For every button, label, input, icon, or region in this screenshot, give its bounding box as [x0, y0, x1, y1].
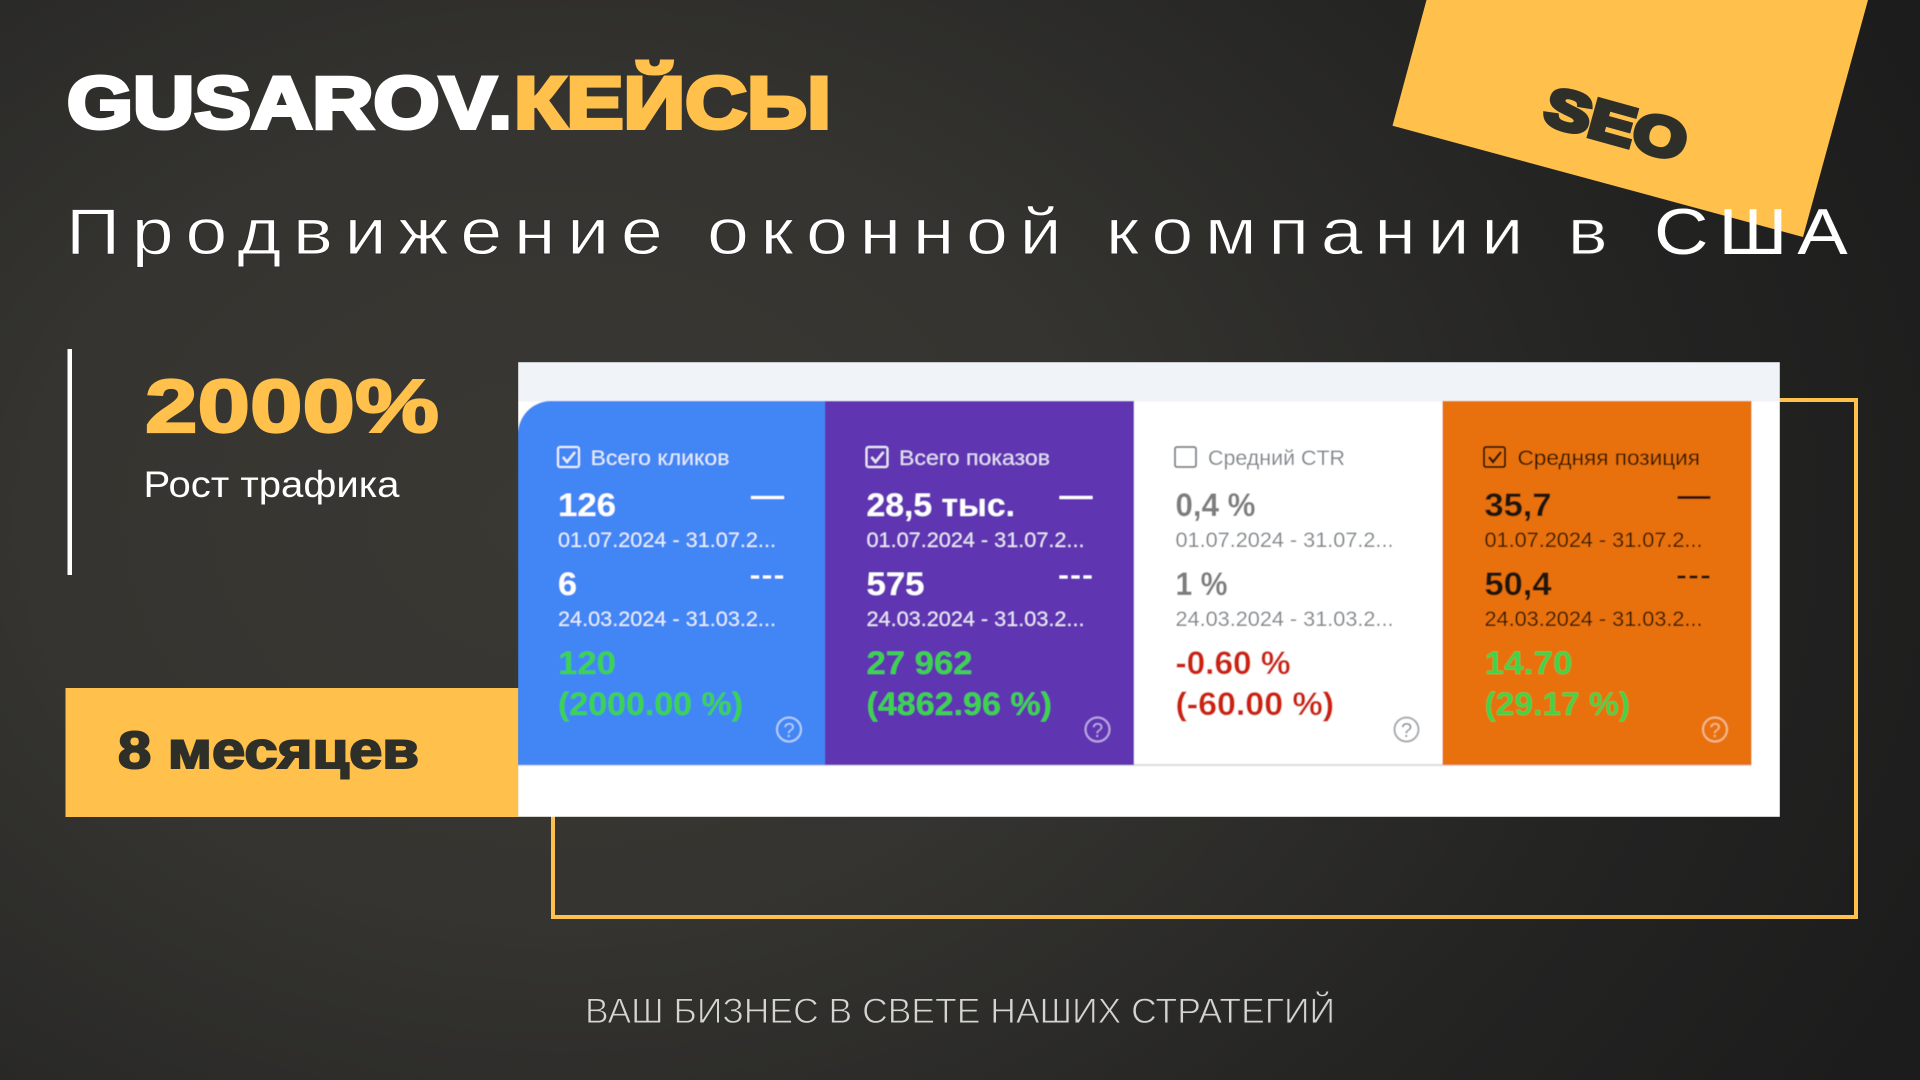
card: total impressions: 575	[866, 566, 924, 602]
help icon	[1394, 718, 1418, 742]
title: GUSAROV.	[67, 63, 512, 144]
card: average position: Средняя позиция	[1518, 447, 1700, 470]
card: total impressions: 28,5 тыс.	[866, 487, 1015, 523]
card: average CTR: 0,4 %	[1176, 487, 1256, 523]
card: total impressions: (4862.96 %)	[866, 686, 1052, 722]
card: average position: 24.03.2024 - 31.03.2...	[1484, 608, 1702, 631]
card: total clicks: Всего кликов	[590, 447, 730, 470]
search console screenshot panel	[518, 362, 1780, 817]
card: total impressions: 27 962	[866, 645, 972, 681]
card: average CTR: Средний CTR	[1208, 447, 1345, 470]
vertical white line	[68, 349, 72, 575]
subtitle: США	[1654, 195, 1848, 268]
card: average CTR: (-60.00 %)	[1176, 686, 1334, 722]
card: average CTR: 24.03.2024 - 31.03.2...	[1176, 608, 1394, 631]
checkbox	[558, 447, 579, 467]
card: average CTR: 1 %	[1176, 566, 1228, 602]
card: average position: 35,7	[1484, 487, 1552, 523]
title	[67, 62, 831, 144]
card: average position	[1442, 401, 1752, 765]
card: average CTR	[1175, 447, 1418, 742]
card: average position: (29.17 %)	[1484, 686, 1630, 722]
card: average CTR: 01.07.2024 - 31.07.2...	[1176, 529, 1394, 552]
metric caption: Рост трафика	[144, 464, 400, 505]
help icon: ?	[1709, 720, 1721, 742]
card: total clicks: 6	[558, 566, 577, 602]
help icon	[1086, 718, 1110, 742]
duration badge	[66, 688, 518, 817]
SEO label: SEO	[1539, 75, 1694, 173]
help icon: ?	[1092, 720, 1103, 742]
checkbox	[1484, 447, 1505, 467]
checkbox	[1175, 447, 1196, 467]
yellow frame	[553, 400, 1856, 917]
card: total impressions: Всего показов	[899, 447, 1050, 470]
card: total clicks: 24.03.2024 - 31.03.2...	[558, 608, 776, 631]
card: average position: 01.07.2024 - 31.07.2...	[1484, 529, 1702, 552]
card: total clicks: 120	[558, 645, 616, 681]
help icon	[1703, 718, 1727, 742]
card: total clicks: 01.07.2024 - 31.07.2...	[558, 529, 776, 552]
card: average CTR: -0.60 %	[1176, 645, 1290, 681]
footer tagline: ВАШ БИЗНЕС В СВЕТЕ НАШИХ СТРАТЕГИЙ	[585, 991, 1335, 1031]
title: КЕЙСЫ	[514, 62, 831, 144]
help icon: ?	[1401, 720, 1412, 742]
card: total impressions: 24.03.2024 - 31.03.2...	[866, 608, 1084, 631]
yellow SEO tag	[1392, 0, 1868, 237]
card: total clicks	[518, 401, 825, 765]
help icon	[777, 718, 801, 742]
help icon: ?	[783, 720, 795, 742]
card: total clicks: 126	[558, 487, 616, 523]
checkbox	[866, 447, 888, 467]
metric: traffic growth: 2000%	[145, 364, 439, 448]
duration text: 8 месяцев	[118, 722, 419, 780]
metric: traffic growth	[144, 364, 439, 505]
card: total impressions	[825, 401, 1134, 765]
card: average position: 50,4	[1484, 566, 1552, 602]
card: average position: 14.70	[1484, 645, 1572, 681]
card: total clicks: (2000.00 %)	[558, 686, 743, 722]
subtitle: Продвижение оконной компании в	[66, 195, 1608, 268]
card: total impressions: 01.07.2024 - 31.07.2...	[866, 529, 1084, 552]
